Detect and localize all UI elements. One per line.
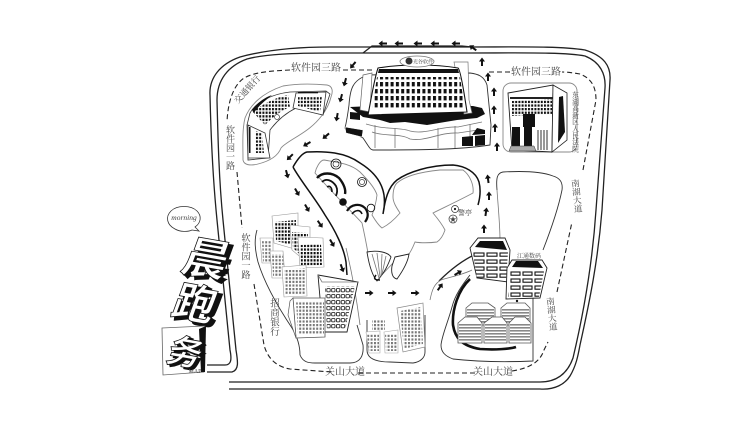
large tower right (506, 260, 547, 302)
panel: centre bottom block (366, 303, 425, 363)
panel: main hotel building (345, 56, 491, 150)
label: 江通数码: 江通数码 (517, 252, 541, 260)
label: 招商银行: 招商银行 (268, 297, 280, 337)
inner dashed road (227, 70, 596, 373)
label: 交通银行: 交通银行 (232, 73, 263, 105)
police booth: 警亭 (458, 208, 472, 217)
label: court name: 东湖高新区人民法院 (570, 90, 579, 153)
title box with 务: 务 (164, 325, 215, 378)
title character 晨: 晨 (175, 222, 240, 290)
panel: central lake (293, 152, 480, 300)
title character 晨: 晨 (179, 225, 244, 293)
road labels: 软件园三路 (291, 61, 341, 74)
speech bubble: morning (168, 206, 200, 231)
concentric circles (317, 159, 375, 222)
title box with 务: 务 (161, 323, 212, 376)
title character 跑: 跑 (169, 272, 231, 337)
police booth (449, 206, 472, 224)
road labels: 南湖大道 (545, 296, 559, 332)
title character 跑: 跑 (165, 269, 227, 334)
road labels: 关山大道 (325, 365, 365, 378)
fan shapes (367, 251, 409, 281)
title box with 务: MAP (188, 369, 202, 375)
road labels: 软件园一路 (225, 124, 235, 171)
road labels: 软件园一路 (240, 232, 251, 280)
police booth: ★ (450, 216, 456, 224)
title: 晨跑务 (161, 222, 244, 378)
arrows: route (283, 40, 500, 296)
hotel sign (400, 56, 434, 67)
panel: bank of communications building (232, 73, 332, 165)
panel: right bottom block (441, 171, 562, 362)
tall tower (318, 275, 358, 332)
small buildings (458, 303, 531, 343)
speech bubble: morning: morning (171, 213, 197, 222)
road labels (225, 61, 584, 378)
road labels: 软件园三路 (511, 65, 561, 78)
front tower (288, 298, 325, 338)
panel: court building (503, 83, 579, 153)
outer road loop (207, 46, 610, 389)
hotel sign: 光谷软件 (413, 58, 433, 66)
panel: left office towers (255, 213, 363, 363)
road labels: 南湖大道 (570, 178, 584, 214)
large tower left (470, 238, 510, 282)
road labels: 关山大道 (473, 365, 513, 378)
